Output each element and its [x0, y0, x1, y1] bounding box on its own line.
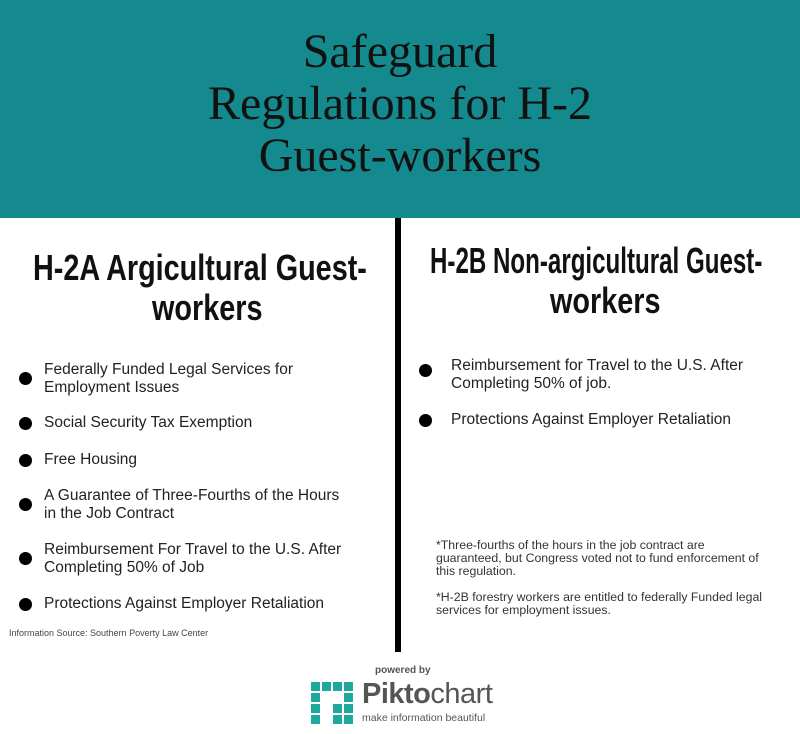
header banner: [0, 0, 800, 218]
list: H-2A: Employment Issues: [44, 379, 179, 396]
heading: H-2B: [430, 240, 762, 321]
footnotes: *H-2B forestry workers are entitled to federally Funded legal: [436, 590, 762, 604]
logo: piktochart: Piktochart: [362, 678, 492, 710]
list: H-2B: Completing 50% of job.: [451, 375, 611, 392]
heading: H-2A: [33, 247, 367, 328]
list: H-2A: Reimbursement For Travel to the U.S. After: [44, 541, 341, 558]
title: Safeguard: [303, 25, 497, 78]
footnotes: [436, 538, 762, 617]
logo: piktochart: powered by: [375, 665, 431, 676]
heading: H-2B: H-2B Non-argicultural Guest-: [430, 240, 762, 281]
list: H-2A: A Guarantee of Three-Fourths of the Hours: [44, 487, 339, 504]
list: H-2B: [419, 357, 743, 428]
title: Guest-workers: [259, 129, 541, 182]
list: H-2A: Protections Against Employer Retaliation: [44, 595, 324, 612]
logo: piktochart: make information beautiful: [362, 712, 485, 724]
heading: H-2A: workers: [152, 287, 262, 328]
footnotes: *Three-fourths of the hours in the job contract are: [436, 538, 705, 552]
title: Regulations for H-2: [208, 77, 592, 130]
list: H-2B: Reimbursement for Travel to the U.S. After: [451, 357, 743, 374]
list: H-2B: Protections Against Employer Retaliation: [451, 411, 731, 428]
list: H-2A: in the Job Contract: [44, 505, 174, 522]
heading: H-2A: H-2A Argicultural Guest-: [33, 247, 367, 288]
list: H-2A: Social Security Tax Exemption: [44, 414, 252, 431]
list: H-2A: Free Housing: [44, 451, 137, 468]
heading: H-2B: workers: [550, 280, 660, 321]
divider: [395, 218, 401, 652]
source: Information Source: Southern Poverty Law Center: [9, 628, 208, 638]
title: [208, 25, 592, 182]
list: H-2A: Federally Funded Legal Services for: [44, 361, 293, 378]
list: H-2A: Completing 50% of Job: [44, 559, 204, 576]
footnotes: services for employment issues.: [436, 603, 611, 617]
footnotes: this regulation.: [436, 564, 516, 578]
logo: piktochart: [311, 665, 493, 724]
footnotes: guaranteed, but Congress voted not to fund enforcement of: [436, 551, 759, 565]
list: H-2A: [19, 361, 341, 612]
